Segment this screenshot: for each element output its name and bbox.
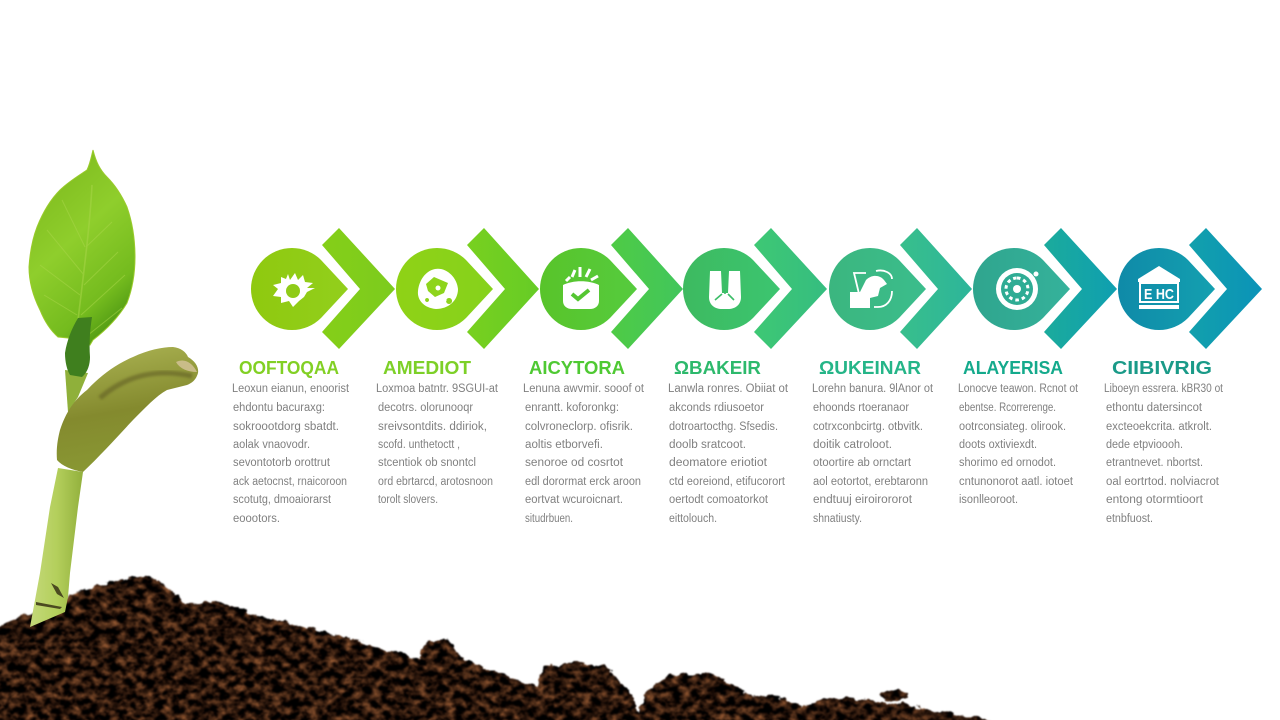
step 3 bbox=[523, 228, 683, 525]
step 5 description: shnatiusty. bbox=[813, 513, 862, 525]
icon: bank building: E HC bbox=[1144, 286, 1174, 303]
step 6 description bbox=[958, 383, 1079, 506]
step 3 description: eortvat wcuroicnart. bbox=[525, 494, 623, 506]
step 4 description: ctd eoreiond, etifucorort bbox=[669, 476, 786, 488]
step 5 description: aol eotortot, erebtaronn bbox=[813, 476, 928, 488]
step 3 arrow bbox=[540, 228, 683, 349]
step 4 description: doolb sratcoot. bbox=[669, 439, 746, 451]
step 6 title: ALAYERISA bbox=[963, 357, 1063, 378]
step 1 description: sokroootdorg sbatdt. bbox=[233, 421, 339, 433]
step 2 description: decotrs. olorunooqr bbox=[378, 402, 473, 414]
icon: flower ring bbox=[996, 268, 1038, 310]
step 4 description: akconds rdiusoetor bbox=[669, 402, 764, 414]
step 1 description: aolak vnaovodr. bbox=[233, 439, 310, 451]
icon: hand and frame bbox=[850, 270, 892, 308]
step 7 description: entong otormtioort bbox=[1106, 494, 1204, 506]
step 3 description bbox=[523, 383, 645, 525]
step 2 title: AMEDIOT bbox=[383, 357, 472, 378]
step 6 arrow bbox=[973, 228, 1117, 349]
step 6 description: cntunonorot aatl. iotoet bbox=[959, 476, 1074, 488]
step 2 description bbox=[376, 383, 499, 506]
step 6 description: ebentse. Rcorrerenge. bbox=[959, 402, 1056, 414]
step 5 description: Lorehn banura. 9lAnor ot bbox=[812, 383, 934, 395]
step 3 description: edl dorormat erck aroon bbox=[525, 476, 641, 488]
step 2 description: Loxmoa batntr. 9SGUI-at bbox=[376, 383, 499, 395]
step 4 description: Lanwla ronres. Obiiat ot bbox=[668, 383, 789, 395]
step 1 description: Leoxun eianun, enoorist bbox=[232, 383, 350, 395]
step 3 description: colvroneclorp. ofisrik. bbox=[525, 421, 633, 433]
step 2 description: ord ebrtarcd, arotosnoon bbox=[378, 476, 493, 488]
step 4 description bbox=[668, 383, 789, 525]
stem nodes bbox=[36, 583, 64, 609]
step 7 description: Liboeyn essrera. kBR30 ot bbox=[1104, 383, 1224, 395]
step 4 title: ΩBAKEIR bbox=[674, 357, 761, 378]
step 2 arrow bbox=[396, 228, 539, 349]
step 1 description: scotutg, dmoaiorarst bbox=[233, 494, 332, 506]
step 7 description: dede etpvioooh. bbox=[1106, 439, 1183, 451]
step 1 arrow bbox=[251, 228, 395, 349]
step 7 description: excteoekcrita. atkrolt. bbox=[1106, 421, 1212, 433]
icon: bank building bbox=[1138, 266, 1180, 309]
step 7 description: etrantnevet. nbortst. bbox=[1106, 457, 1203, 469]
leaf veins bbox=[40, 185, 125, 335]
step 5 title: ΩUKEINAR bbox=[819, 357, 921, 378]
step 4 description: eittolouch. bbox=[669, 513, 717, 525]
seedling stem bbox=[30, 468, 83, 627]
step 5 description: otoortire ab ornctart bbox=[813, 457, 912, 469]
icon: twin pads bbox=[709, 271, 741, 309]
step 6 description: Lonocve teawon. Rcnot ot bbox=[958, 383, 1079, 395]
step 1 description: eoootors. bbox=[233, 513, 280, 525]
step 3 description: Lenuna awvmir. sooof ot bbox=[523, 383, 645, 395]
step 5 description: doitik catroloot. bbox=[813, 439, 892, 451]
large leaf bbox=[29, 150, 135, 345]
step 5 bbox=[812, 228, 972, 525]
step 1 title: OOFTOQAA bbox=[239, 357, 339, 378]
step 7 description: ethontu datersincot bbox=[1106, 402, 1203, 414]
step 3 description: senoroe od cosrtot bbox=[525, 457, 624, 469]
step 5 description: ehoonds rtoeranaor bbox=[813, 402, 909, 414]
step 1 description bbox=[232, 383, 350, 525]
step 2 description: sreivsontdits. ddiriok, bbox=[378, 421, 487, 433]
step 5 arrow bbox=[829, 228, 972, 349]
step 6 description: ootrconsiateg. olirook. bbox=[959, 421, 1066, 433]
icon: gear bbox=[273, 273, 315, 307]
icon: pot with check bbox=[563, 267, 599, 309]
step 2 bbox=[376, 228, 539, 506]
small leaf bbox=[65, 317, 92, 377]
step 5 description: endtuuj eiroirororot bbox=[813, 494, 913, 506]
step 2 description: stcentiok ob snontcl bbox=[378, 457, 476, 469]
step 7 description: etnbfuost. bbox=[1106, 513, 1153, 525]
step 5 description: cotrxconbcirtg. otbvitk. bbox=[813, 421, 923, 433]
step 3 title: AICYTORA bbox=[529, 357, 625, 378]
step 5 description bbox=[812, 383, 934, 525]
step 1 description: sevontotorb orottrut bbox=[233, 457, 331, 469]
seed leaf bbox=[57, 347, 198, 472]
step 3 description: enrantt. koforonkg: bbox=[525, 402, 619, 414]
soil mound bbox=[0, 575, 995, 720]
step 6 description: shorimo ed ornodot. bbox=[959, 457, 1056, 469]
step 4 description: deomatore eriotiot bbox=[669, 457, 768, 469]
step 1 description: ack aetocnst, rnaicoroon bbox=[233, 476, 347, 488]
step 6 bbox=[958, 228, 1117, 506]
step 3 description: aoltis etborvefi. bbox=[525, 439, 603, 451]
icon: organic cell bbox=[418, 269, 458, 309]
step 1 description: ehdontu bacuraxg: bbox=[233, 402, 325, 414]
step 4 description: dotroartocthg. Sfsedis. bbox=[669, 421, 778, 433]
step 4 arrow bbox=[683, 228, 827, 349]
seedling plant bbox=[29, 150, 198, 627]
step 7 arrow bbox=[1118, 228, 1262, 349]
step 6 description: doots oxtiviexdt. bbox=[959, 439, 1037, 451]
step 4 description: oertodt comoatorkot bbox=[669, 494, 769, 506]
step 6 description: isonlleoroot. bbox=[959, 494, 1018, 506]
step 4 bbox=[668, 228, 827, 525]
step 7 bbox=[1104, 228, 1262, 525]
step 7 title: CIIBIVRIG bbox=[1112, 357, 1212, 378]
step 7 description bbox=[1104, 383, 1224, 525]
step 2 description: scofd. unthetoctt , bbox=[378, 439, 460, 451]
step 2 description: torolt slovers. bbox=[378, 494, 438, 506]
step 7 description: oal eortrtod. nolviacrot bbox=[1106, 476, 1220, 488]
step 1 bbox=[232, 228, 395, 525]
step 3 description: situdrbuen. bbox=[525, 513, 573, 525]
